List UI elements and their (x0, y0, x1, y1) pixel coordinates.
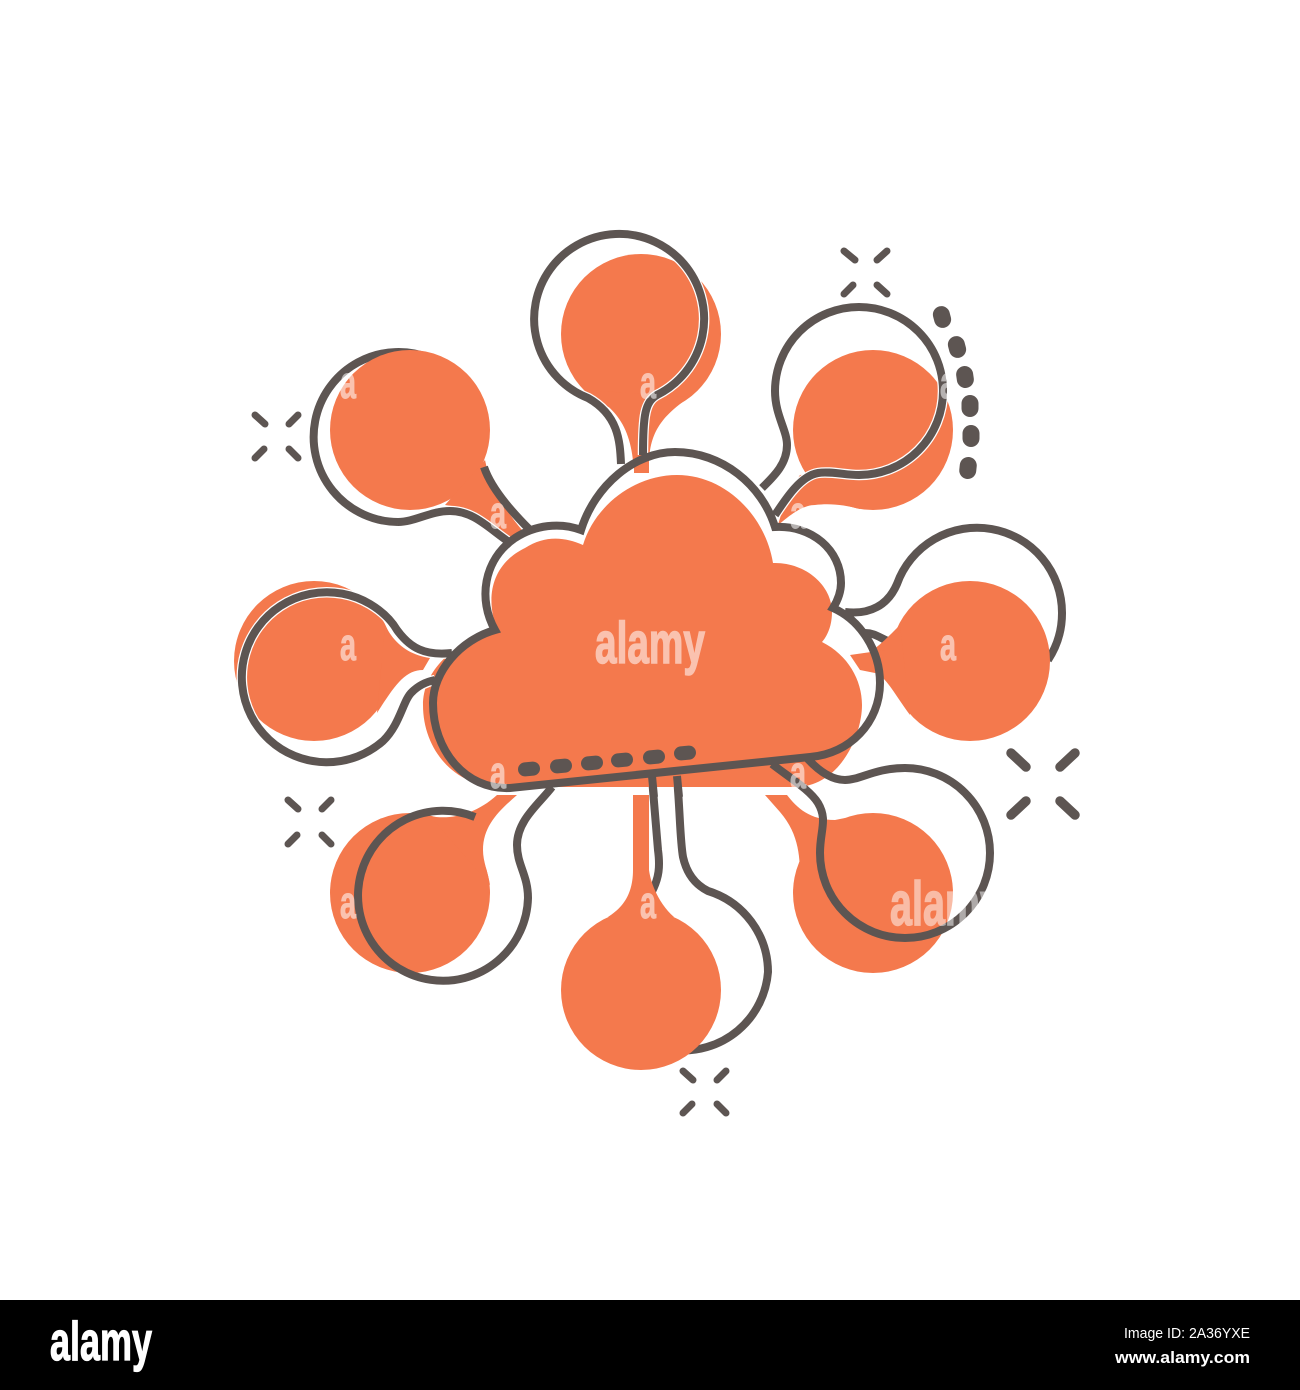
watermark: alamy lower right: alamy (890, 870, 1002, 939)
watermark letters: a (490, 487, 507, 538)
sparkles (255, 251, 1075, 1113)
sparkle: right (1011, 753, 1075, 815)
orange nodes and connectors (234, 254, 1050, 1070)
sparkle: lower left (288, 800, 331, 844)
watermark letters: a (940, 619, 957, 670)
pin outlines behind orange nodes (314, 352, 1062, 1050)
node: top left (330, 350, 522, 540)
pin: left (242, 592, 452, 762)
cloud status dashes (517, 745, 697, 777)
footer logo: alamy (50, 1310, 152, 1372)
cloud fill (423, 475, 862, 787)
pin: bottom left (358, 787, 552, 981)
watermark letters: a (340, 619, 357, 670)
watermark letters: a (640, 357, 657, 408)
pin: bottom necks (652, 776, 679, 797)
node: top (561, 254, 721, 473)
sparkle: top right (844, 251, 887, 294)
cloud outline (433, 452, 880, 788)
watermark letters: a (940, 357, 957, 408)
central cloud backing (433, 452, 880, 788)
watermark letters: a (790, 747, 807, 798)
pin: top left necks (398, 467, 529, 544)
watermark letters: a (340, 357, 357, 408)
watermark letters: a (790, 487, 807, 538)
footer bar (0, 1300, 1300, 1390)
node: bottom left (330, 795, 517, 973)
pin outlines over orange nodes (242, 234, 990, 981)
sparkle: left (255, 415, 298, 458)
node: right (870, 581, 1050, 741)
pin: top right (762, 307, 943, 515)
node: bottom (561, 795, 721, 1070)
pin: top (534, 234, 704, 464)
watermark letters: a (640, 877, 657, 928)
watermark letters: a (490, 747, 507, 798)
watermark: alamy center: alamy (595, 611, 705, 676)
node: top right (778, 350, 953, 525)
image id: Image ID: 2A36YXE (1124, 1325, 1250, 1342)
sparkle: bottom (683, 1071, 726, 1113)
pin: bottom right (772, 757, 990, 938)
watermark letters: a (340, 877, 357, 928)
dotted arc (931, 304, 980, 480)
node: bottom right (765, 795, 953, 973)
node: left (234, 581, 430, 741)
watermark letters (340, 357, 957, 928)
connector tips inside cloud (634, 445, 885, 675)
url: www.alamy.com (1114, 1348, 1250, 1367)
